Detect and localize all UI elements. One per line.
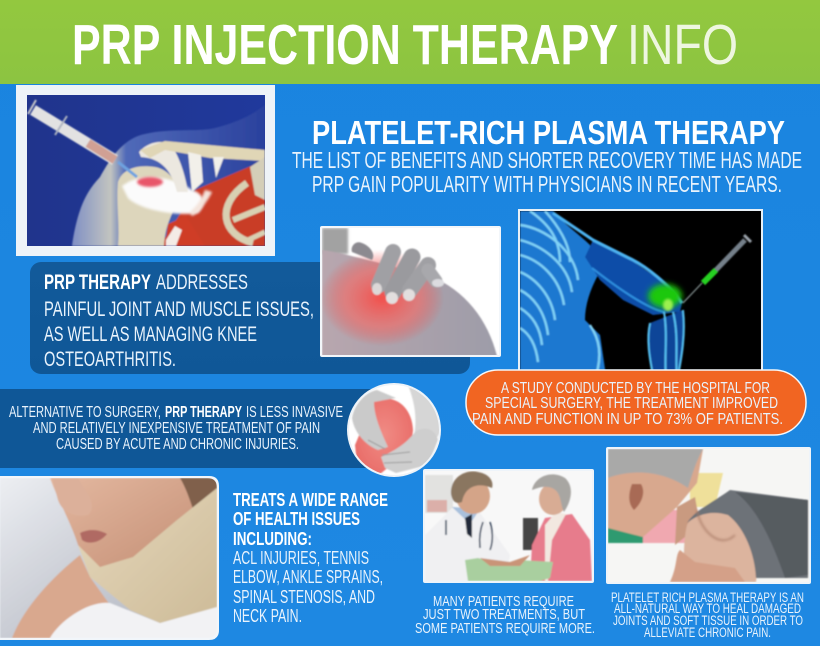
photo: doctor examining knee	[606, 447, 811, 584]
caption: many patients: MANY PATIENTS REQUIRE	[433, 594, 574, 610]
panel: PRP therapy addresses: OSTEOARTHRITIS.	[44, 348, 176, 371]
text: treats a wide range of health issues: NECK PAIN.	[233, 606, 302, 626]
text: treats a wide range of health issues: SPINAL STENOSIS, AND	[233, 587, 375, 607]
panel: alternative to surgery: AND RELATIVELY INEXPENSIVE TREATMENT OF PAIN	[33, 420, 320, 437]
caption: platelet rich plasma therapy	[611, 590, 804, 640]
header banner	[0, 0, 820, 84]
text: treats a wide range of health issues: OF HEALTH ISSUES	[233, 509, 360, 529]
panel: alternative to surgery: PRP THERAPY	[165, 404, 242, 421]
intro text	[292, 147, 802, 197]
text: treats a wide range of health issues: ACL INJURIES, TENNIS	[233, 548, 369, 568]
panel: PRP therapy addresses: PRP THERAPY	[44, 271, 151, 294]
panel: alternative to surgery: CAUSED BY ACUTE AND CHRONIC INJURIES.	[56, 436, 299, 453]
title: INFO	[627, 13, 738, 77]
caption: many patients	[415, 594, 595, 637]
caption: platelet rich plasma therapy: ALLEVIATE CHRONIC PAIN.	[644, 625, 771, 640]
caption: many patients: JUST TWO TREATMENTS, BUT	[423, 607, 585, 623]
photo: hand on painful shoulder	[320, 226, 501, 357]
heading: platelet-rich plasma therapy	[292, 114, 802, 197]
panel: PRP therapy addresses: ADDRESSES	[156, 271, 248, 294]
panel: PRP therapy addresses: PAINFUL JOINT AND MUSCLE ISSUES,	[44, 298, 314, 321]
title: PRP INJECTION THERAPY	[72, 13, 618, 77]
panel: alternative to surgery: ALTERNATIVE TO SURGERY,	[9, 404, 161, 421]
photo: hands on red knee	[347, 383, 442, 478]
photo: woman with neck brace	[0, 476, 219, 640]
photo: shoulder injection illustration	[16, 85, 275, 256]
photo: doctor with patient	[423, 469, 594, 583]
panel: alternative to surgery: IS LESS INVASIVE	[246, 404, 343, 421]
text: treats a wide range of health issues: INCLUDING:	[233, 529, 312, 549]
panel: alternative to surgery	[0, 389, 392, 468]
panel: PRP therapy addresses: AS WELL AS MANAGING KNEE	[44, 323, 257, 346]
text: treats a wide range of health issues: ELBOW, ANKLE SPRAINS,	[233, 567, 383, 587]
text: treats a wide range of health issues: TREATS A WIDE RANGE	[233, 490, 388, 510]
caption: many patients: SOME PATIENTS REQUIRE MORE.	[415, 621, 595, 637]
panel: PRP therapy addresses	[30, 262, 470, 374]
photo: glowing blue skeleton with syringe	[518, 209, 763, 377]
text: treats a wide range of health issues	[233, 490, 388, 626]
callout: study results	[466, 370, 806, 435]
